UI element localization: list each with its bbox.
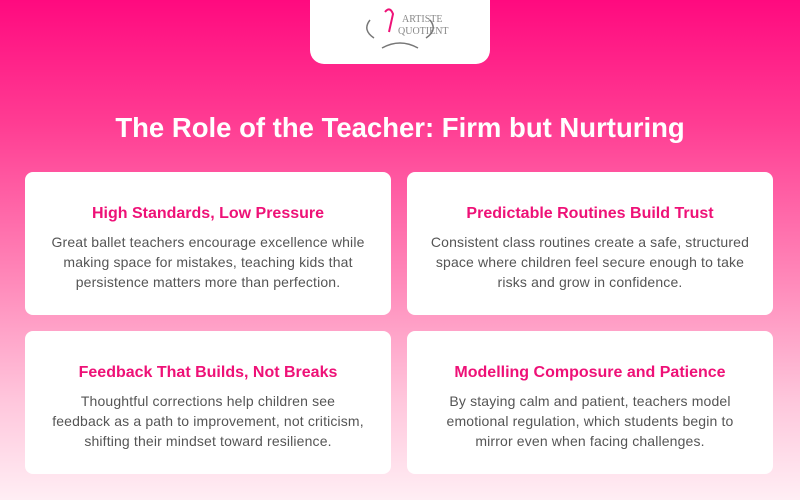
card: routines: space where children feel secure enough to take — [436, 254, 744, 270]
card: composure: Modelling Composure and Patience — [454, 364, 726, 381]
title: The Role of the Teacher: Firm but Nurturing — [115, 112, 685, 143]
card: composure: mirror even when facing challenges. — [475, 433, 705, 449]
card: routines: Consistent class routines create a safe, structured — [431, 234, 749, 250]
card: routines — [407, 172, 773, 315]
card: routines: Predictable Routines Build Trust — [466, 205, 714, 222]
card: composure: emotional regulation, which students begin to — [447, 413, 733, 429]
card: feedback: Thoughtful corrections help children see — [81, 393, 335, 409]
logo: QUOTIENT — [398, 26, 449, 37]
card: routines: risks and grow in confidence. — [498, 274, 682, 290]
card: composure: By staying calm and patient, teachers model — [449, 393, 731, 409]
card: feedback — [25, 331, 391, 474]
card: high standards: Great ballet teachers encourage excellence while — [51, 234, 365, 250]
card: composure — [407, 331, 773, 474]
logo — [310, 0, 490, 64]
card: high standards: High Standards, Low Pressure — [92, 205, 324, 222]
card: feedback: feedback as a path to improvement, not criticism, — [52, 413, 364, 429]
card: high standards: making space for mistakes, teaching kids that — [63, 254, 353, 270]
logo: ARTISTE — [402, 14, 443, 25]
card: high standards — [25, 172, 391, 315]
card: feedback: Feedback That Builds, Not Breaks — [79, 364, 337, 381]
card: feedback: shifting their mindset toward resilience. — [84, 433, 332, 449]
card: high standards: persistence matters more than perfection. — [76, 274, 340, 290]
